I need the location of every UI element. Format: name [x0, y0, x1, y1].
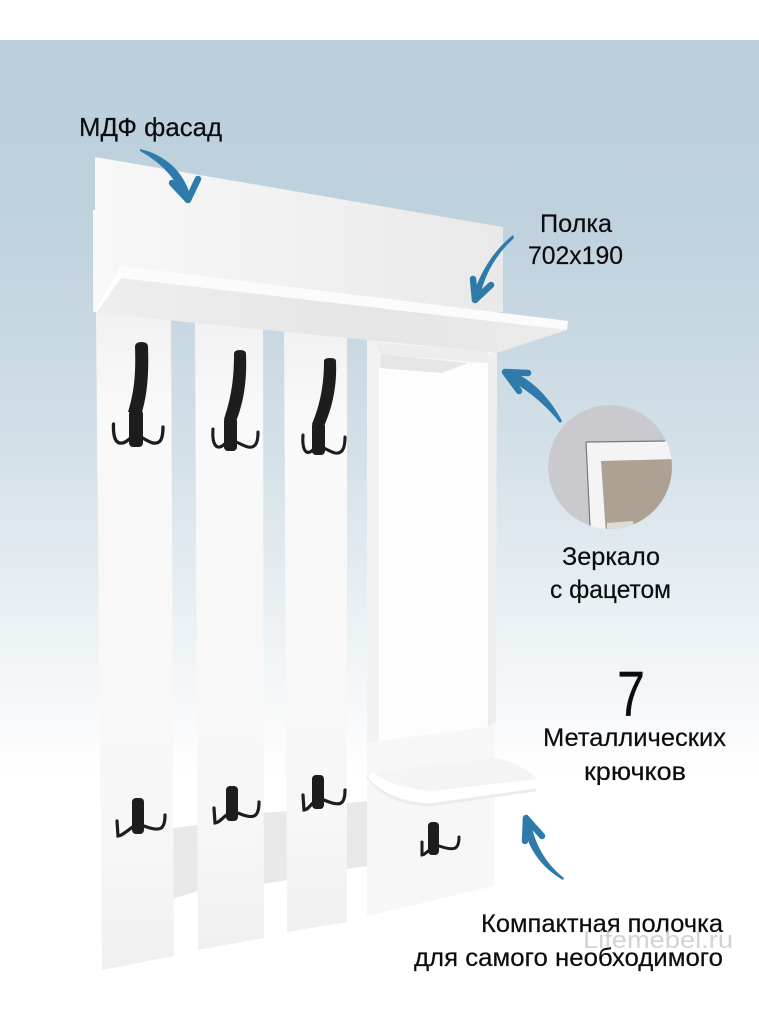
number: 7 hooks: 7 [617, 658, 645, 730]
back panel: MDF facade [93, 157, 503, 312]
label: shelf [528, 210, 623, 270]
watermark: Lifemebel.ru [583, 927, 733, 954]
vertical strip 1 [96, 312, 174, 970]
small shelf [368, 758, 537, 805]
mirror panel [367, 340, 497, 916]
hook 4 [117, 798, 165, 836]
label: shelf: 702х190 [528, 242, 623, 270]
label: faceted mirror: с фацетом [550, 576, 671, 604]
arrow: small shelf [523, 818, 564, 880]
hook 7 [422, 822, 459, 855]
label: MDF facade: МДФ фасад [79, 112, 222, 142]
hook 2 [213, 350, 258, 451]
hook 1 [113, 342, 163, 447]
arrow: MDF facade [140, 149, 198, 200]
top shelf [95, 266, 568, 353]
label: metal hooks [543, 724, 726, 786]
coat rack furniture [93, 157, 568, 970]
icon: mirror facet circle [548, 405, 675, 535]
label: compact shelf: для самого необходимого [414, 944, 723, 972]
vertical strip 2 [195, 320, 264, 950]
label: faceted mirror [550, 543, 671, 604]
label: faceted mirror: Зеркало [562, 543, 660, 571]
vertical strip 3 [284, 330, 347, 932]
label: compact shelf [414, 910, 723, 972]
arrow: mirror [505, 370, 562, 423]
label: shelf: Полка [540, 210, 612, 238]
label: metal hooks: Металлических [543, 724, 726, 752]
hook 5 [214, 786, 259, 823]
hook 6 [303, 775, 345, 810]
label: compact shelf: Компактная полочка [481, 910, 723, 938]
lower back bars [172, 801, 368, 899]
arrow: shelf [472, 235, 514, 300]
mirror [379, 363, 488, 741]
label: metal hooks: крючков [584, 758, 686, 786]
hook 3 [303, 358, 345, 455]
